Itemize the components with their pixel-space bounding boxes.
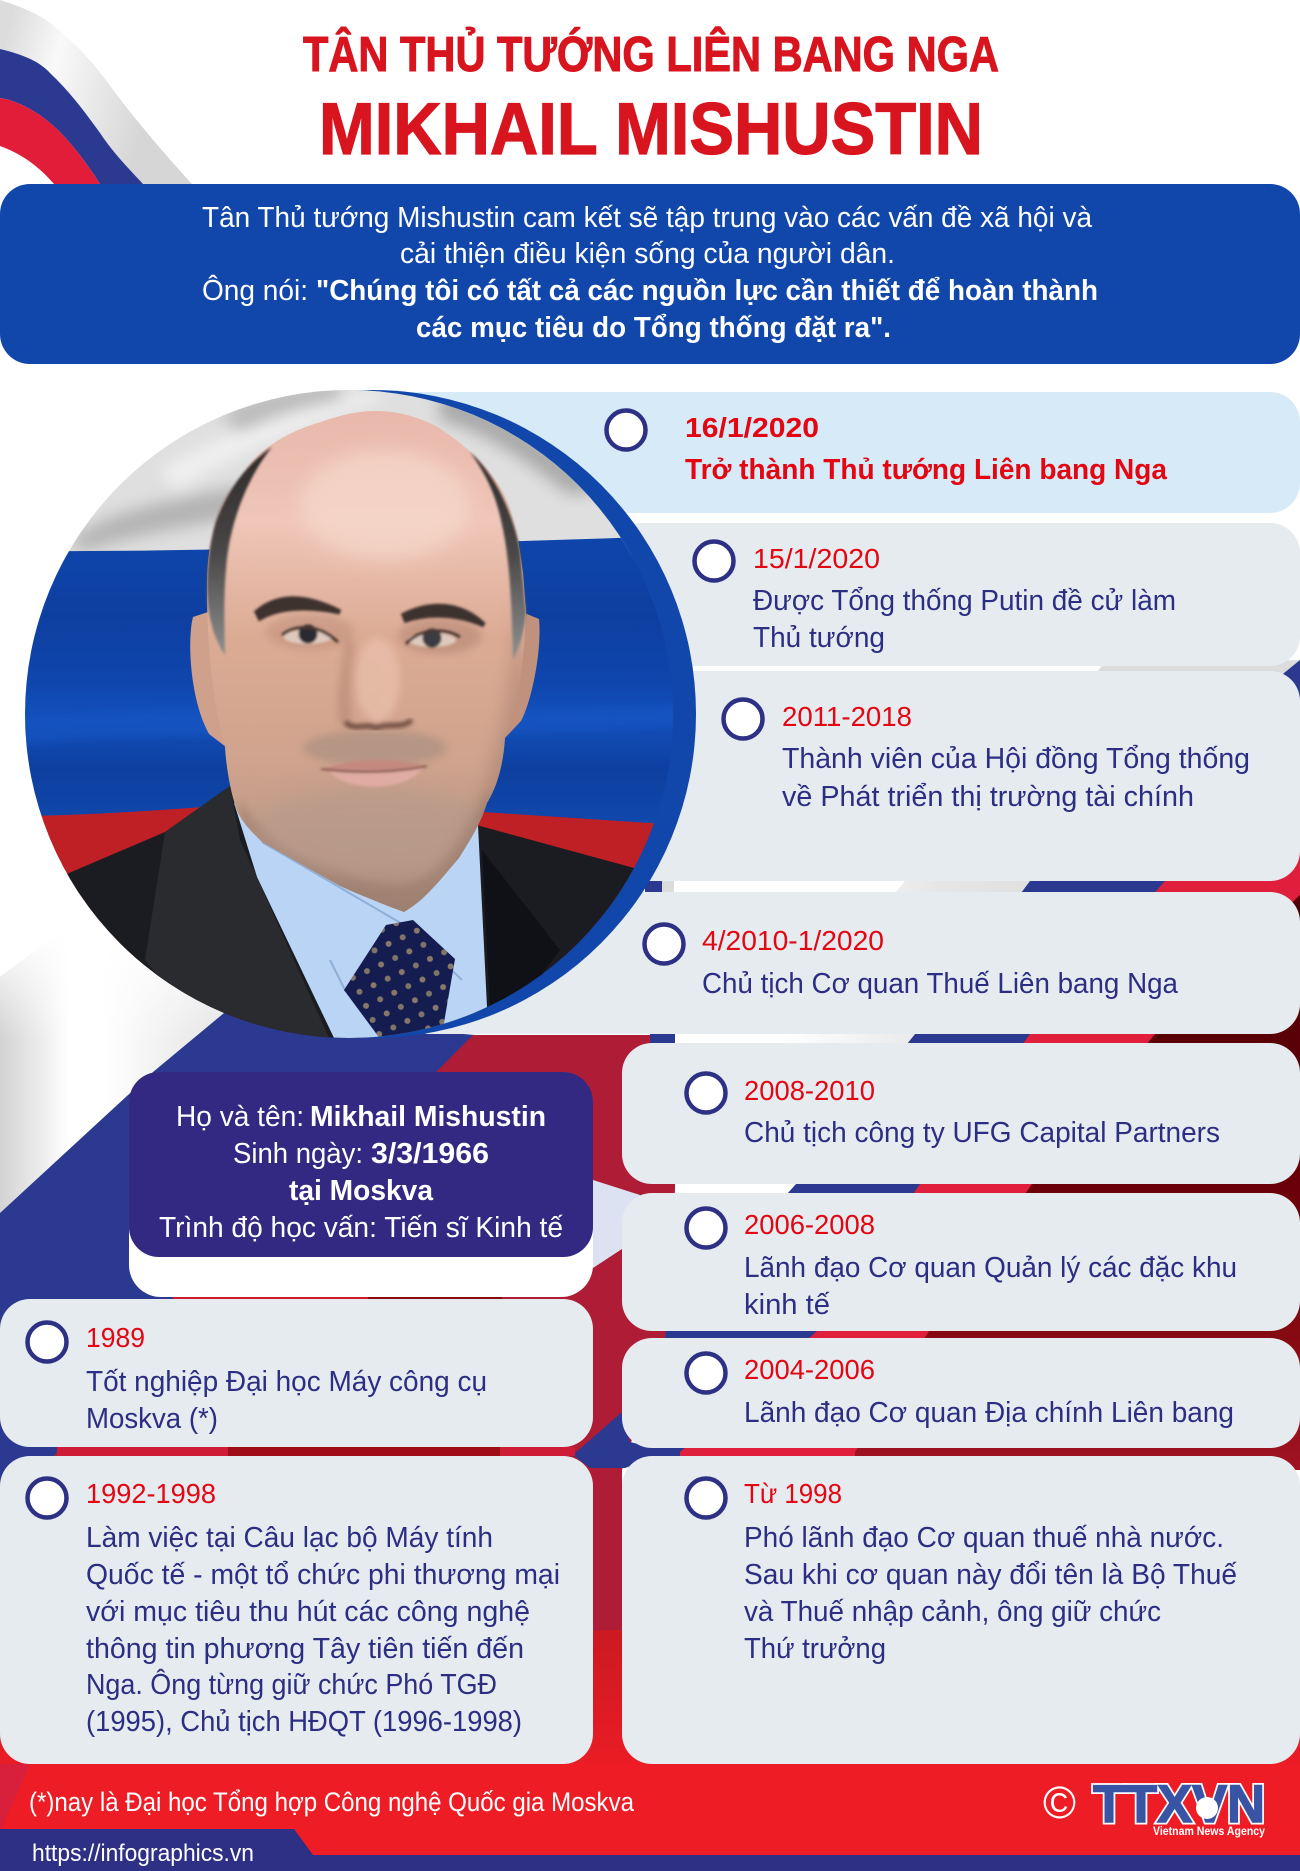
mouth bbox=[321, 760, 427, 787]
panel: timeline 2011-2018: Thành viên của Hội đồng Tổng thống bbox=[782, 743, 1250, 775]
panel: timeline 4/2010-1/2020 bbox=[400, 892, 1300, 1034]
panel: timeline 2004-2006: 2004-2006 bbox=[744, 1354, 875, 1385]
panel: personal profile: tại Moskva bbox=[289, 1175, 434, 1207]
title: MIKHAIL MISHUSTIN bbox=[319, 89, 983, 170]
panel: intro banner: các mục tiêu do Tổng thống đặt ra". bbox=[416, 312, 891, 344]
panel: timeline 1992-1998: với mục tiêu thu hút các công nghệ bbox=[86, 1596, 530, 1628]
panel: timeline 15/1/2020: Thủ tướng bbox=[753, 622, 885, 654]
head bbox=[207, 411, 526, 912]
nose bbox=[345, 720, 412, 728]
panel: timeline 2004-2006: Lãnh đạo Cơ quan Địa chính Liên bang bbox=[744, 1397, 1234, 1429]
panel: timeline from 1998: Phó lãnh đạo Cơ quan thuế nhà nước. bbox=[744, 1522, 1224, 1554]
title: TÂN THỦ TƯỚNG LIÊN BANG NGA bbox=[303, 27, 999, 82]
logo: TTXVN: TTXVN bbox=[1093, 1775, 1265, 1834]
panel: timeline 1992-1998: Quốc tế - một tổ chức phi thương mại bbox=[86, 1559, 560, 1591]
panel: personal profile: Sinh ngày: bbox=[233, 1138, 363, 1170]
panel: timeline 1989: Tốt nghiệp Đại học Máy công cụ bbox=[86, 1366, 487, 1398]
panel: timeline 16/1/2020: 16/1/2020 bbox=[685, 412, 819, 443]
panel: timeline 2008-2010: 2008-2010 bbox=[744, 1075, 875, 1106]
panel: timeline from 1998: Từ 1998 bbox=[744, 1478, 842, 1509]
background: left flag ribbon, blue and crimson waves bbox=[0, 881, 1300, 1855]
panel: timeline 4/2010-1/2020: Chủ tịch Cơ quan Thuế Liên bang Nga bbox=[702, 968, 1179, 1000]
hair bbox=[207, 447, 526, 660]
panel: intro banner: Tân Thủ tướng Mishustin cam kết sẽ tập trung vào các vấn đề xã hội và bbox=[202, 202, 1093, 234]
panel: personal profile: Trình độ học vấn: Tiến sĩ Kinh tế bbox=[159, 1212, 563, 1244]
panel: timeline 2006-2008: Lãnh đạo Cơ quan Quản lý các đặc khu bbox=[744, 1252, 1237, 1284]
logo: TTXVN: © bbox=[1043, 1777, 1076, 1828]
panel: timeline from 1998: và Thuế nhập cảnh, ông giữ chức bbox=[744, 1596, 1161, 1628]
eyes bbox=[282, 624, 460, 648]
panel: personal profile: Mikhail Mishustin bbox=[310, 1101, 546, 1133]
panel: timeline 15/1/2020 bbox=[480, 523, 1300, 666]
footnote: (*)nay là Đại học Tổng hợp Công nghệ Quốc gia Moskva bbox=[29, 1787, 635, 1817]
panel: timeline 1992-1998: Nga. Ông từng giữ chức Phó TGĐ bbox=[86, 1667, 497, 1701]
panel: timeline 2008-2010 bbox=[622, 1043, 1300, 1184]
panel: timeline 1992-1998: Làm việc tại Câu lạc bộ Máy tính bbox=[86, 1522, 493, 1554]
panel: timeline 2008-2010: Chủ tịch công ty UFG Capital Partners bbox=[744, 1117, 1220, 1149]
panel: personal profile: 3/3/1966 bbox=[371, 1138, 489, 1170]
panel: timeline 4/2010-1/2020: 4/2010-1/2020 bbox=[702, 925, 884, 956]
panel: timeline 16/1/2020 bbox=[380, 392, 1300, 513]
panel: timeline 1992-1998: thông tin phương Tây tiên tiến đến bbox=[86, 1633, 524, 1665]
tie bbox=[344, 920, 455, 1040]
panel: intro banner: cải thiện điều kiện sống của người dân. bbox=[400, 238, 895, 270]
panel: timeline 1989: 1989 bbox=[86, 1322, 145, 1353]
shirt bbox=[234, 803, 488, 1040]
panel: timeline 2006-2008 bbox=[622, 1193, 1300, 1331]
decorative flag ribbon top left bbox=[0, 0, 192, 184]
panel: timeline 1989: Moskva (*) bbox=[86, 1403, 218, 1435]
panel: timeline from 1998 bbox=[622, 1456, 1300, 1764]
logo: TTXVN: TTXVN bbox=[1093, 1775, 1265, 1834]
panel: timeline from 1998: Sau khi cơ quan này đổi tên là Bộ Thuế bbox=[744, 1559, 1237, 1591]
suit bbox=[67, 786, 634, 1038]
panel: intro banner: Ông nói: bbox=[202, 273, 308, 307]
panel: timeline 2011-2018 bbox=[500, 671, 1300, 881]
panel: timeline 1992-1998: 1992-1998 bbox=[86, 1478, 216, 1509]
panel: timeline 2006-2008: 2006-2008 bbox=[744, 1209, 875, 1240]
panel: timeline 1992-1998 bbox=[0, 1456, 593, 1764]
panel: timeline 16/1/2020: Trở thành Thủ tướng Liên bang Nga bbox=[685, 454, 1168, 486]
panel: timeline from 1998: Thứ trưởng bbox=[744, 1633, 886, 1665]
footer strip with website: https://infographics.vn bbox=[32, 1840, 254, 1867]
panel: intro banner bbox=[0, 184, 1300, 364]
eyebrows bbox=[257, 599, 484, 625]
panel: timeline 1992-1998: (1995), Chủ tịch HĐQT (1996-1998) bbox=[86, 1706, 522, 1738]
panel: timeline 2011-2018: 2011-2018 bbox=[782, 701, 912, 732]
panel: timeline 1989 bbox=[0, 1299, 593, 1447]
panel: personal profile: Họ và tên: bbox=[176, 1101, 304, 1133]
logo: TTXVN: Vietnam News Agency bbox=[1153, 1824, 1265, 1838]
panel: intro banner: "Chúng tôi có tất cả các nguồn lực cần thiết để hoàn thành bbox=[316, 275, 1098, 307]
panel: timeline 15/1/2020: Được Tổng thống Putin đề cử làm bbox=[753, 585, 1176, 617]
title bbox=[303, 27, 999, 170]
panel: timeline 2011-2018: về Phát triển thị trường tài chính bbox=[782, 781, 1194, 813]
panel: timeline 2004-2006 bbox=[622, 1338, 1300, 1448]
background: right flag bands bbox=[640, 660, 1300, 1470]
panel: timeline 2006-2008: kinh tế bbox=[744, 1289, 830, 1321]
portrait: circular photo with flag bbox=[20, 380, 696, 1045]
footer strip with website bbox=[0, 1829, 1300, 1871]
ears bbox=[190, 612, 226, 747]
panel: timeline 15/1/2020: 15/1/2020 bbox=[753, 543, 880, 574]
panel: personal profile bbox=[129, 1072, 593, 1297]
